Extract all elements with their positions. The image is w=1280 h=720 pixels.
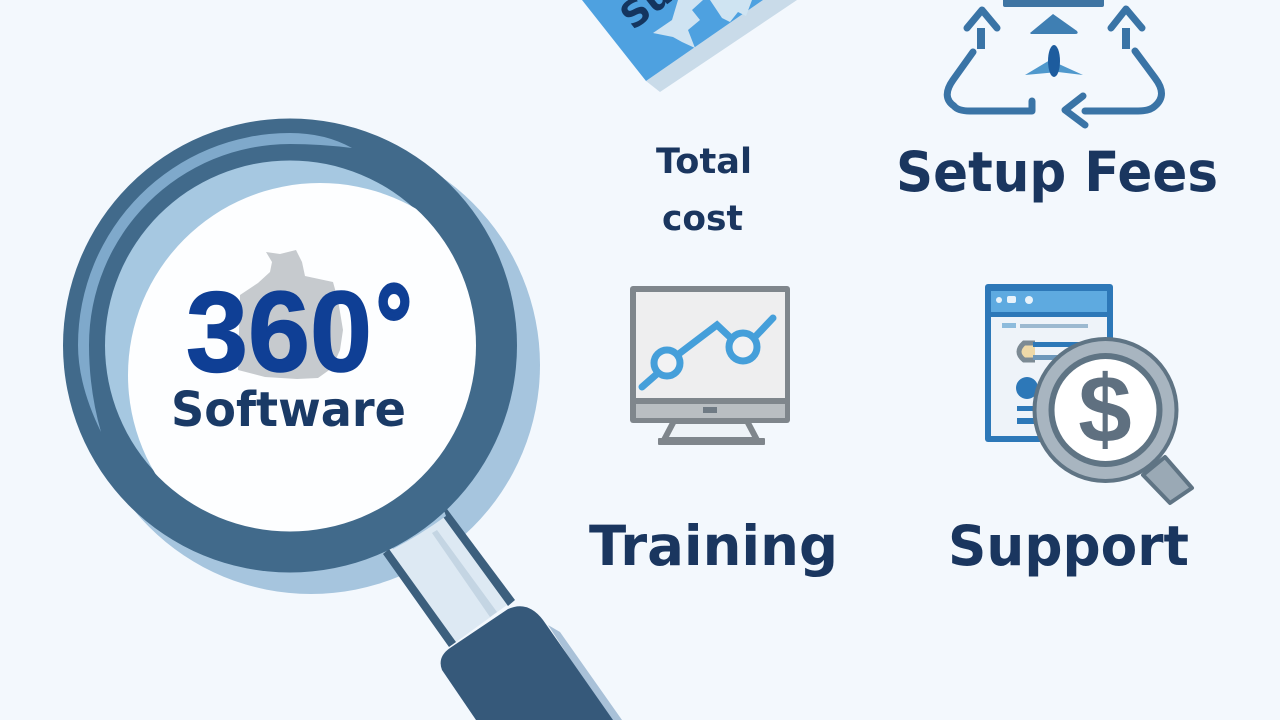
- text: Total cost: [656, 142, 752, 239]
- heading: 360: 360: [186, 269, 372, 396]
- grey map shape behind text: [238, 250, 343, 379]
- heading: Support: Support: [948, 514, 1189, 578]
- icon: setup fees cycle: [947, 0, 1162, 125]
- icon: cropped subscription card: [582, 0, 797, 92]
- heading: Training: Training: [589, 514, 838, 578]
- icon: support document with dollar magnifier: [985, 284, 1192, 503]
- heading: Software: Software: [171, 382, 406, 438]
- heading: Setup Fees: Setup Fees: [896, 140, 1218, 204]
- icon: training monitor with chart: [630, 286, 790, 445]
- text: Total cost: Total: [656, 142, 752, 182]
- logo: 360 degree software: [171, 250, 416, 438]
- text: Total cost: cost: [662, 199, 743, 239]
- degree symbol: °: [372, 264, 416, 392]
- icon: large magnifying glass: [63, 118, 622, 720]
- dollar sign: $: [1078, 356, 1132, 463]
